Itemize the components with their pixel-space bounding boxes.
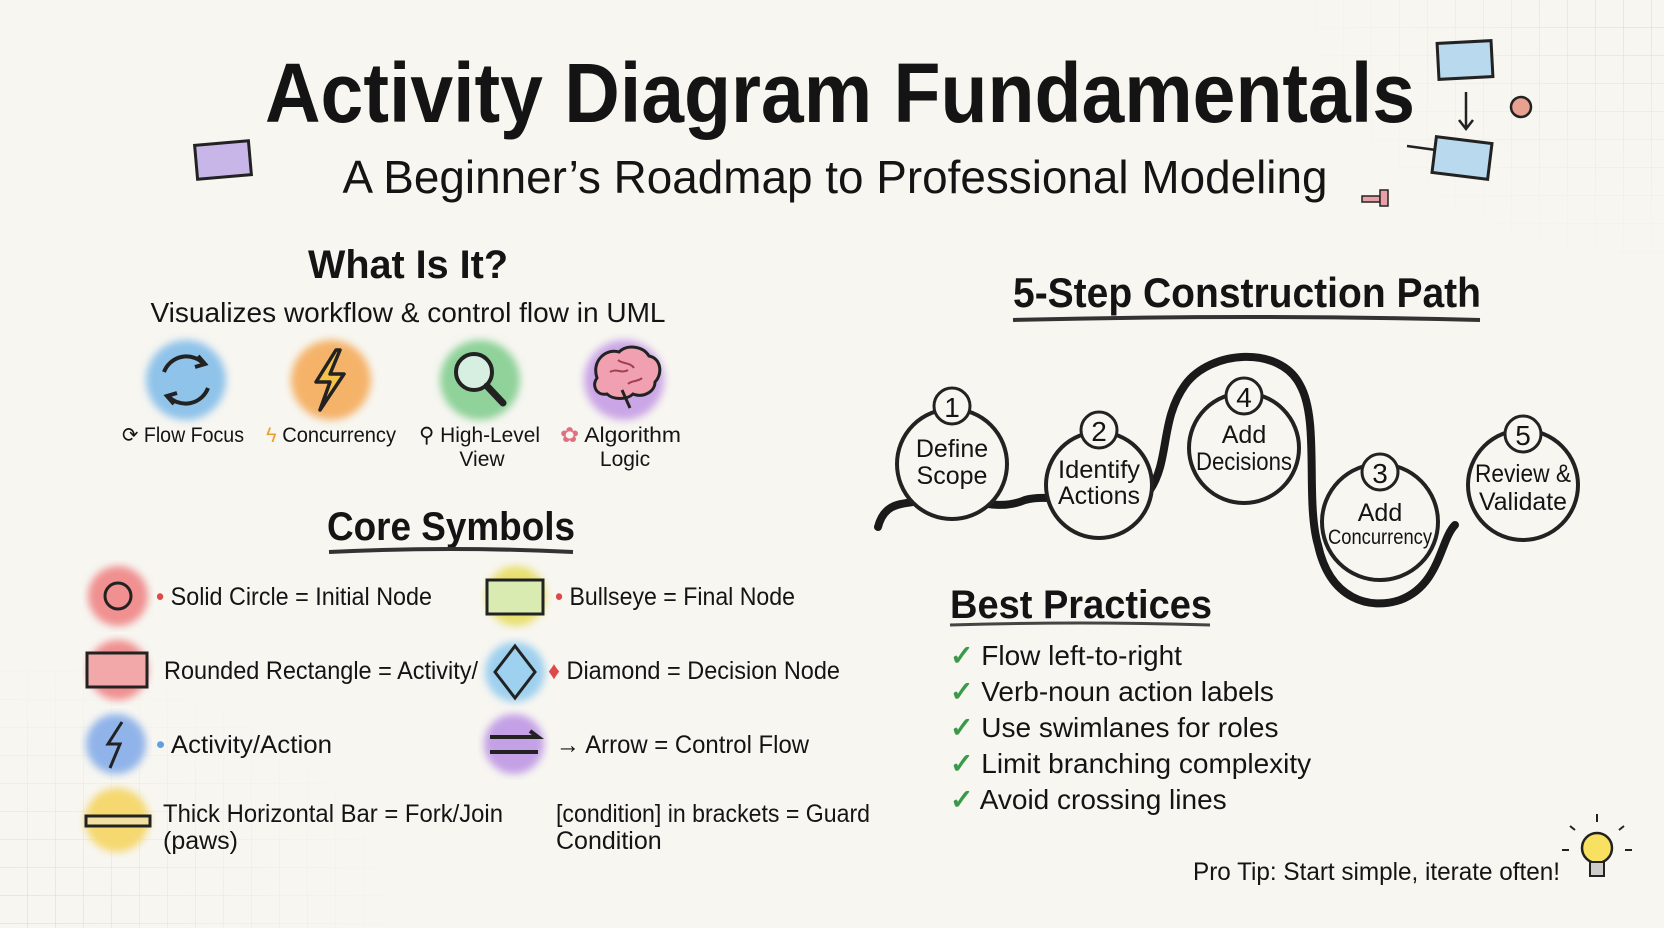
icon: magnifier (440, 340, 520, 420)
list: best practices: ✓ Use swimlanes for roles (950, 712, 1278, 743)
list: best practices: ✓ Flow left-to-right (950, 640, 1182, 671)
list: best practices: ✓ Avoid crossing lines (950, 784, 1227, 815)
heading: What Is It?: What Is It? (308, 243, 508, 287)
symbol: control flow: → Arrow = Control Flow (556, 731, 810, 759)
icon: brain (584, 340, 664, 420)
symbol: fork/join: Thick Horizontal Bar = Fork/Join (163, 800, 503, 828)
symbol: control flow (484, 714, 810, 774)
step 2: 2 (1091, 416, 1107, 447)
symbol: decision (485, 642, 840, 702)
symbol: activity (87, 640, 478, 700)
symbol: guard: Condition (556, 827, 662, 855)
symbol: initial node (88, 566, 432, 626)
step 1: 1 (944, 392, 960, 423)
step 3: Add (1358, 499, 1402, 527)
step 5 (1468, 416, 1578, 540)
label: algorithm logic: Logic (600, 448, 650, 471)
step 1: Define (916, 435, 988, 463)
decoration: flow mini-diagram (1362, 41, 1531, 206)
callout: pro tip: Pro Tip: Start simple, iterate often! (1193, 858, 1560, 886)
heading: Core Symbols: Core Symbols (327, 505, 575, 549)
list: best practices: ✓ Limit branching complexity (950, 748, 1311, 779)
label: high-level view: ⚲ High-Level (419, 424, 540, 447)
step 3: 3 (1372, 458, 1388, 489)
label: algorithm logic (560, 424, 681, 471)
panel: core symbols (85, 566, 870, 855)
symbol: fork/join (85, 788, 503, 855)
heading: Best Practices: Best Practices (950, 583, 1212, 627)
icon: flow focus (146, 340, 226, 420)
step 2: Actions (1058, 482, 1140, 510)
label: high-level view: View (459, 448, 505, 471)
step 1: Scope (917, 462, 987, 490)
list: best practices: ✓ Verb-noun action labels (950, 676, 1274, 707)
label: algorithm logic: ✿ Algorithm (560, 424, 681, 447)
step 3: Concurrency (1328, 526, 1432, 549)
arrow: winding path (878, 357, 1455, 603)
step 4 (1189, 378, 1299, 503)
step 4: Add (1222, 421, 1266, 449)
symbol: initial node: • Solid Circle = Initial Node (156, 583, 432, 611)
step 4: Decisions (1196, 448, 1292, 476)
symbol: action (86, 714, 332, 774)
icon: light bulb (1562, 814, 1632, 876)
step 5: Validate (1479, 488, 1567, 516)
symbol: action: • Activity/Action (156, 731, 332, 759)
symbol: final node: • Bullseye = Final Node (555, 583, 795, 611)
step 1 (897, 388, 1007, 519)
step 4: 4 (1236, 382, 1252, 413)
symbol: guard: [condition] in brackets = Guard (556, 800, 870, 828)
decoration: purple box (195, 141, 251, 179)
label: flow focus: ⟳ Flow Focus (122, 424, 244, 447)
subtitle: A Beginner’s Roadmap to Professional Modeling (342, 151, 1328, 203)
panel: features icons (122, 340, 681, 471)
label: concurrency: ϟ Concurrency (266, 424, 396, 447)
heading: 5-Step Construction Path: 5-Step Construction Path (1013, 269, 1481, 316)
step 5: Review & (1475, 460, 1571, 488)
title: Activity Diagram Fundamentals (265, 46, 1415, 140)
icon: concurrency (291, 340, 371, 420)
chart: construction path (878, 357, 1578, 603)
symbol: decision: ♦ Diamond = Decision Node (548, 657, 840, 685)
label: high-level view (419, 424, 540, 471)
text: definition: Visualizes workflow & control flow in UML (150, 297, 666, 328)
symbol: fork/join: (paws) (163, 827, 238, 855)
symbol: activity: Rounded Rectangle = Activity/ (164, 657, 478, 685)
step 2 (1046, 412, 1152, 538)
step 3 (1322, 454, 1438, 580)
symbol: final node (486, 566, 795, 626)
step 5: 5 (1515, 420, 1531, 451)
symbol: guard (556, 800, 870, 855)
step 2: Identify (1058, 456, 1141, 484)
list: best practices (950, 640, 1311, 815)
